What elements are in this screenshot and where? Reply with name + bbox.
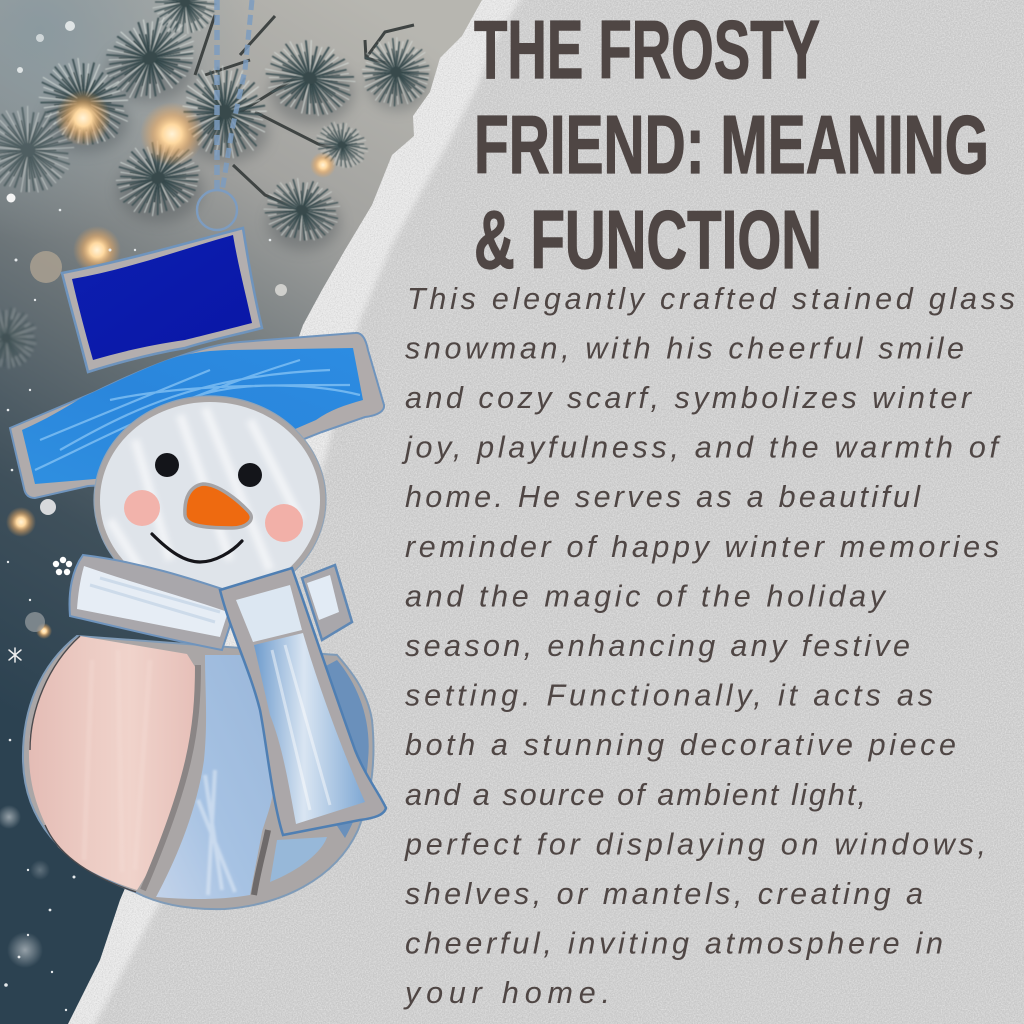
scarf tail upper glass (236, 585, 302, 642)
branch shadows (44, 42, 428, 250)
body text: meaning and function description: home. He serves as a beautiful (405, 480, 921, 514)
left chain (214, 0, 220, 190)
body text: meaning and function description (401, 282, 1015, 1010)
left eye (155, 453, 179, 477)
body text: meaning and function description: reminder of happy winter memories (405, 530, 999, 564)
carrot nose (185, 484, 251, 528)
body text: meaning and function description: both a stunning decorative piece (405, 728, 956, 762)
body text: meaning and function description: and the magic of the holiday (405, 579, 887, 613)
body text: meaning and function description: setting. Functionally, it acts as (405, 679, 933, 713)
hanging ring (197, 190, 237, 230)
brim glass (22, 348, 363, 484)
brim (10, 333, 384, 498)
head glass (100, 402, 320, 598)
icon: small snow star (9, 648, 21, 662)
blue lower-right panel (270, 837, 327, 882)
top hat (62, 228, 262, 372)
body text: meaning and function description: snowman, with his cheerful smile (405, 332, 964, 366)
scarf neck band glass (77, 566, 228, 637)
body text: meaning and function description: your home. (403, 976, 610, 1010)
pink glass panel (29, 636, 197, 890)
scarf (70, 555, 386, 835)
blue glass panel (156, 655, 274, 899)
title (474, 3, 989, 286)
body outer lead (23, 636, 373, 909)
head (94, 396, 326, 604)
right chain (222, 0, 252, 192)
left cheek (124, 490, 160, 526)
right body sliver (300, 660, 369, 838)
scarf right end (302, 565, 352, 640)
scarf neck band lead (70, 555, 240, 650)
body text: meaning and function description: season, enhancing any festive (405, 629, 910, 663)
snowman stained glass ornament (10, 228, 386, 909)
title: & FUNCTION (474, 193, 822, 286)
body text: meaning and function description: and a source of ambient light, (405, 778, 866, 812)
hat lead (62, 228, 262, 372)
title: THE FROSTY (474, 3, 820, 96)
brim lead (10, 333, 384, 498)
branch stems (195, 15, 414, 210)
right cheek (265, 504, 303, 542)
body (23, 636, 373, 909)
body text: meaning and function description: joy, playfulness, and the warmth of (401, 431, 1002, 465)
body text: meaning and function description: perfect for displaying on windows, (404, 827, 986, 861)
smile (152, 534, 242, 562)
body text: meaning and function description: cheerful, inviting atmosphere in (405, 927, 943, 961)
fairy lights and bokeh (0, 21, 336, 1011)
body text: meaning and function description: This elegantly crafted stained glass (407, 282, 1015, 316)
scarf tail lower glass (254, 633, 365, 824)
right eye (238, 463, 262, 487)
hat glass (72, 235, 252, 360)
hanging chain and loop (197, 0, 252, 230)
body text: meaning and function description: and cozy scarf, symbolizes winter (405, 381, 973, 415)
pine branches with frost (0, 0, 443, 250)
dark foliage at left edge (0, 304, 40, 372)
scarf tail lead (220, 568, 386, 835)
icon: white snowflake (53, 557, 72, 575)
body text: meaning and function description: shelves, or mantels, creating a (405, 877, 923, 911)
